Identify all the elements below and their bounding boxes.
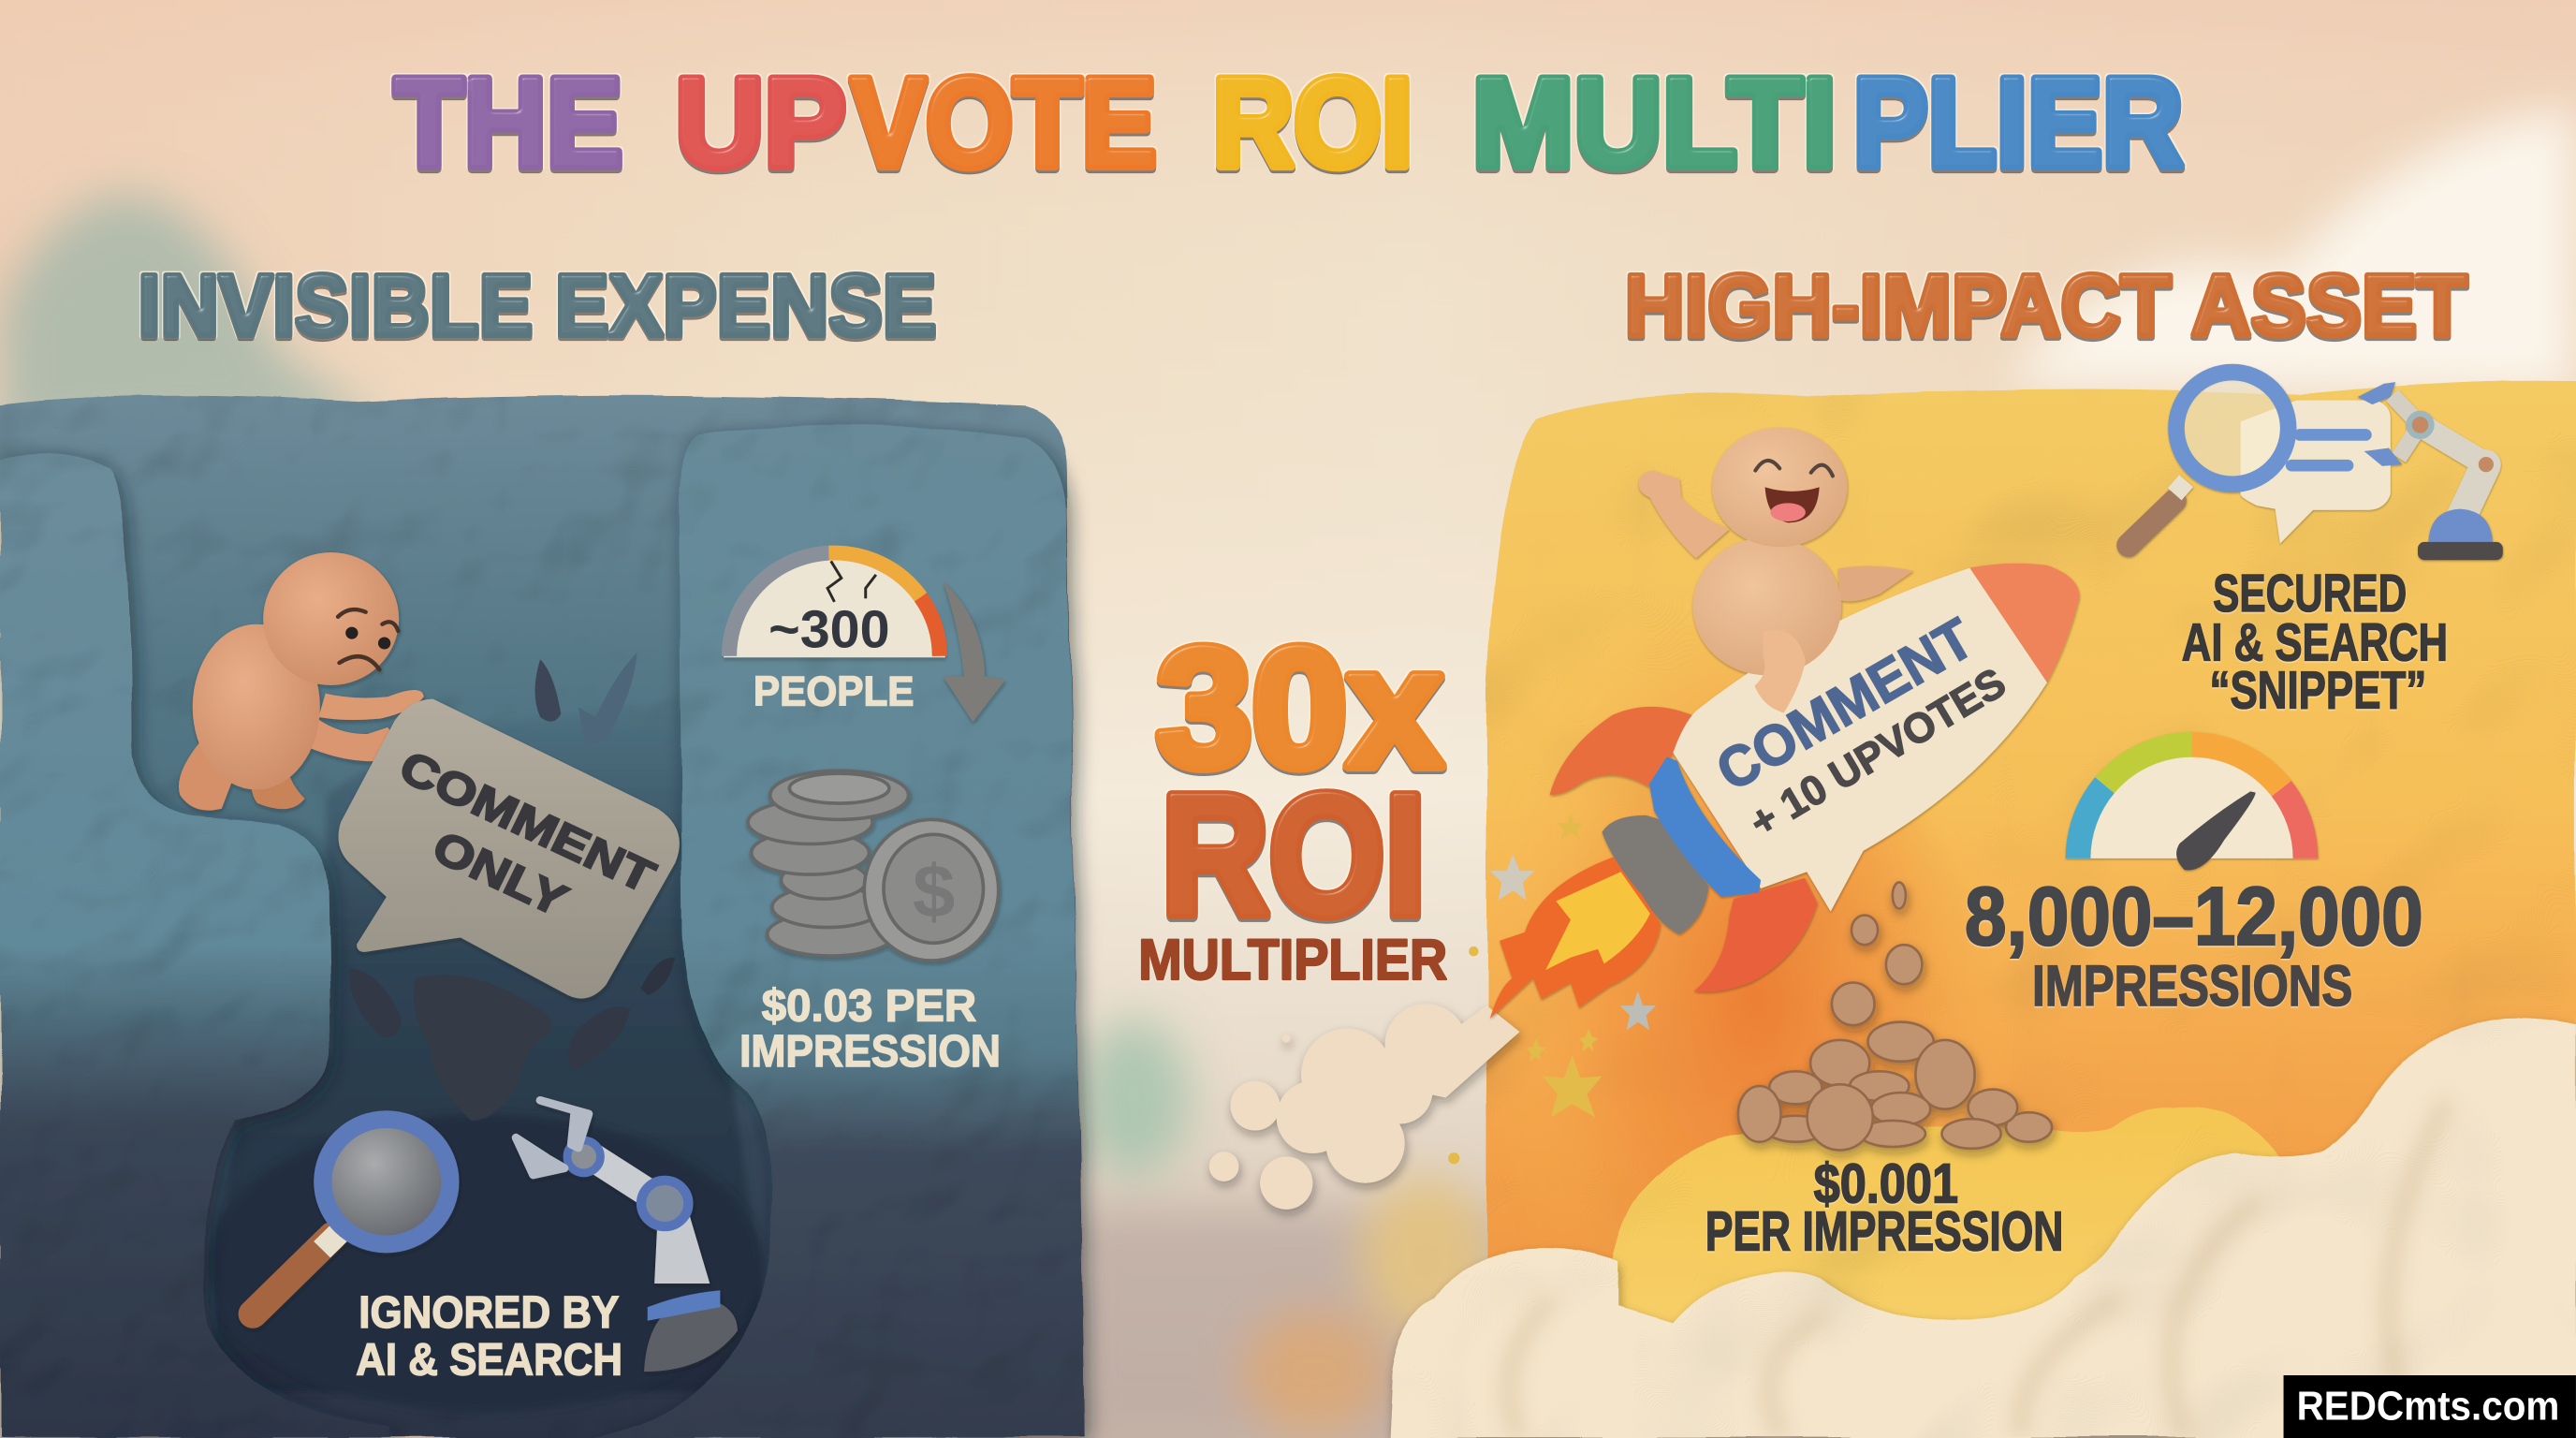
speech bubble: comment only xyxy=(338,698,680,999)
yellow hill mound xyxy=(1606,1107,2291,1364)
main title: THE xyxy=(394,51,622,193)
watermark badge: REDCmts.com xyxy=(2297,1383,2559,1429)
rocket band xyxy=(1649,756,1761,897)
character: worried figure xyxy=(179,552,424,811)
rocket text: comment: COMMENT xyxy=(1705,606,1983,803)
cream cloud xyxy=(1388,1019,2576,1438)
panel: invisible expense cliff xyxy=(0,396,1084,1437)
icon: grey robot arm xyxy=(516,1100,738,1372)
arrow: downward trend xyxy=(944,581,1005,722)
label: ignored by ai and search: AI & SEARCH xyxy=(356,1335,622,1386)
stars xyxy=(1448,814,1656,1164)
rocket nozzle xyxy=(1602,815,1708,934)
label: cost per impression: $0.03 PER xyxy=(762,981,976,1031)
smoke trail xyxy=(1209,1004,1519,1210)
rocket body xyxy=(1673,568,2047,912)
label: impressions range: 8,000–12,000 xyxy=(1965,871,2423,962)
heading: high-impact asset: HIGH-IMPACT ASSET xyxy=(1625,257,2467,354)
label: cost per impression xyxy=(739,981,1001,1077)
icon: grey magnifying glass xyxy=(253,1120,450,1314)
label: ignored by ai and search: IGNORED BY xyxy=(359,1287,619,1338)
main title: PLIER xyxy=(1853,51,2183,193)
main title xyxy=(394,51,2183,193)
rocket flame xyxy=(1490,855,1661,1019)
label: cost per impression asset xyxy=(1705,1152,2063,1263)
label: secured ai and search snippet: AI & SEARCH xyxy=(2182,613,2448,672)
multiplier value: 30x: 30x xyxy=(1157,613,1442,802)
main title: UP xyxy=(675,51,846,193)
label: cost per impression: IMPRESSION xyxy=(739,1027,1001,1077)
label: secured ai and search snippet: SECURED xyxy=(2213,564,2407,623)
icon: magnifier with speech bubble and robot arm xyxy=(2129,373,2503,560)
icon: grey coin stack: $ xyxy=(913,850,955,934)
gauge: about 300 people: ~300 xyxy=(768,600,890,659)
icon: grey coin stack xyxy=(748,770,999,961)
watermark badge xyxy=(2284,1375,2576,1438)
rocket xyxy=(1490,428,2079,1019)
gauge: about 300 people xyxy=(724,549,945,659)
gauge: impressions xyxy=(2068,734,2316,870)
main title: MULTI xyxy=(1472,51,1837,193)
label: cost per impression asset: PER IMPRESSION xyxy=(1705,1200,2063,1263)
label: cost per impression asset: $0.001 xyxy=(1814,1152,1958,1215)
speech bubble: comment only: COMMENT xyxy=(391,741,663,902)
rocket fins xyxy=(1550,707,1817,992)
label: people: PEOPLE xyxy=(754,668,915,715)
rocket text: ten upvotes: + 10 UPVOTES xyxy=(1742,660,2013,846)
falling rock fragments and arrow xyxy=(349,653,675,1121)
main title: ROI xyxy=(1212,51,1412,193)
character: happy figure xyxy=(1639,428,1913,713)
speech bubble: comment only: ONLY xyxy=(425,822,575,927)
heading: invisible expense: INVISIBLE EXPENSE xyxy=(138,257,936,354)
icon: copper coin pile xyxy=(1738,882,2052,1151)
label: ignored by ai and search xyxy=(356,1287,622,1386)
label: secured ai and search snippet xyxy=(2182,564,2448,719)
multiplier label: multiplier: MULTIPLIER xyxy=(1138,928,1447,992)
multiplier label: roi: ROI xyxy=(1162,759,1426,950)
label: secured ai and search snippet: “SNIPPET” xyxy=(2210,660,2426,719)
main title: VOTE xyxy=(851,51,1157,193)
panel: high-impact asset block xyxy=(1486,381,2576,1438)
rocket nose xyxy=(1969,564,2079,682)
label: impressions: IMPRESSIONS xyxy=(2032,954,2352,1019)
